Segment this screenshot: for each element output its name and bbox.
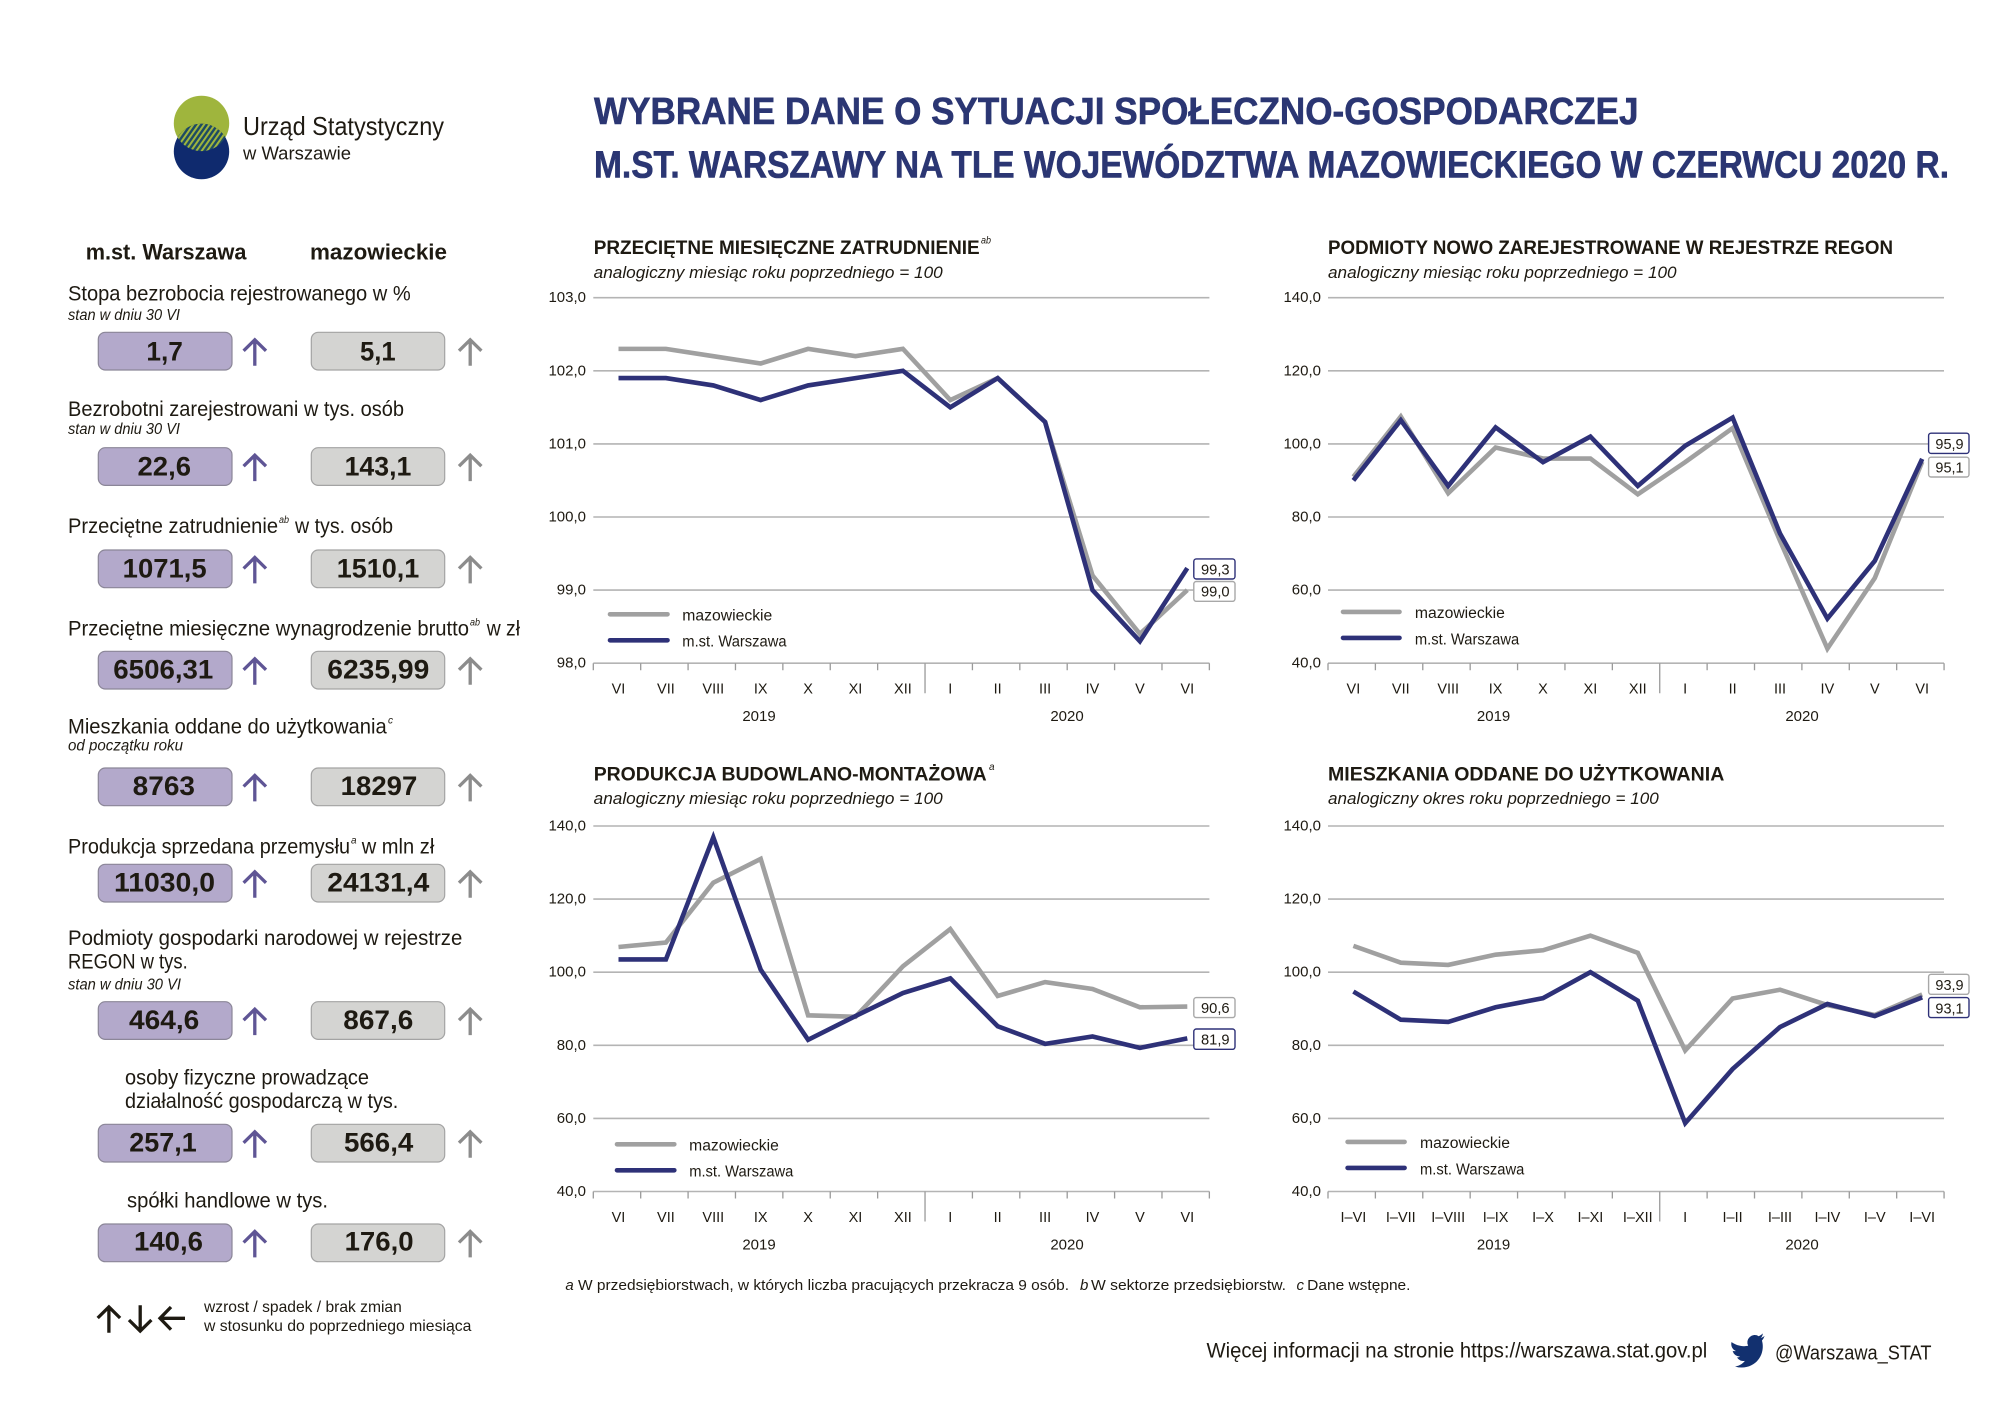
indicator: przeciętne zatrudnienie: Przeciętne zatrudnienie: [68, 515, 278, 538]
legend: m.st. Warszawa: [689, 1164, 794, 1181]
indicator: spółki handlowe: 140,6: [134, 1227, 203, 1257]
indicator: stopa bezrobocia: 1,7: [146, 337, 183, 367]
chart heading: a: [989, 762, 995, 773]
y axis labels: [548, 818, 586, 1200]
x axis labels: XI: [1584, 682, 1597, 698]
footnotes: a: [565, 1277, 574, 1294]
x axis labels: XI: [849, 682, 862, 698]
panel: key indicators: [68, 239, 520, 1335]
indicator: mieszkania oddane: 18297: [341, 771, 417, 801]
chart heading: [594, 762, 995, 808]
x axis labels: 2020: [1050, 1236, 1084, 1253]
x axis labels: III: [1774, 682, 1786, 698]
chart: produkcja budowlano-montażowa: [548, 762, 1235, 1253]
indicator: spółki handlowe: [98, 1189, 481, 1262]
x axis labels: I: [948, 682, 952, 698]
value label: 99,3: [1194, 559, 1235, 579]
y axis labels: 120,0: [548, 891, 586, 908]
chart: mieszkania oddane do użytkowania: [1283, 762, 1969, 1253]
column heading: m.st. Warszawa: m.st. Warszawa: [86, 239, 247, 264]
legend: [610, 607, 787, 651]
x axis labels: [612, 682, 1194, 725]
value label: 81,9: [1194, 1029, 1235, 1049]
y axis labels: 100,0: [548, 964, 586, 981]
line: mazowieckie: [1353, 936, 1922, 1050]
x axis labels: II: [1729, 682, 1737, 698]
y axis labels: 80,0: [1292, 508, 1321, 526]
y axis labels: 60,0: [1292, 1110, 1321, 1127]
y axis labels: 120,0: [1283, 891, 1321, 908]
indicator: stopa bezrobocia: 5,1: [360, 337, 396, 367]
x axis labels: IX: [754, 1210, 768, 1226]
x axis labels: VI: [612, 1210, 625, 1226]
x axis labels: [612, 1210, 1194, 1253]
indicator: osoby fizyczne: 257,1: [129, 1128, 197, 1158]
x axis labels: 2019: [1477, 708, 1510, 725]
indicator: przeciętne zatrudnienie: ab: [279, 515, 289, 526]
legend: m.st. Warszawa: [682, 634, 787, 651]
y axis labels: 40,0: [1292, 1183, 1321, 1200]
footnotes: W sektorze przedsiębiorstw.: [1091, 1277, 1286, 1294]
indicator: wynagrodzenie brutto: 6506,31: [113, 654, 213, 684]
x axis labels: [1341, 1210, 1935, 1253]
indicator: stopa bezrobocia: stan w dniu 30 VI: [68, 307, 181, 324]
indicator: wynagrodzenie brutto: ab: [470, 618, 480, 629]
y axis labels: 100,0: [1283, 435, 1321, 452]
value label: 99,0: 99,0: [1201, 584, 1230, 601]
chart heading: [594, 236, 991, 282]
x axis labels: II: [994, 682, 1002, 698]
x axis labels: I–X: [1532, 1210, 1554, 1226]
value label: 95,1: 95,1: [1935, 460, 1964, 477]
value label: 95,9: [1929, 433, 1969, 453]
line: m.st. Warszawa: [1353, 418, 1922, 619]
indicator: mieszkania oddane: 8763: [133, 771, 195, 801]
value label: 93,1: 93,1: [1935, 1000, 1964, 1018]
x axis labels: XII: [894, 682, 912, 698]
x axis labels: VI: [1347, 682, 1360, 698]
x axis labels: III: [1039, 1210, 1051, 1226]
legend: [1348, 1135, 1525, 1178]
indicator: podmioty gospodarki narodowej: Podmioty gospodarki narodowej w rejestrze: [68, 927, 462, 950]
indicator: spółki handlowe: 176,0: [345, 1227, 414, 1257]
legend: [1343, 605, 1520, 648]
y axis labels: 140,0: [1283, 289, 1321, 306]
indicator: stopa bezrobocia: [68, 283, 481, 370]
x axis labels: I: [1683, 682, 1687, 698]
x axis labels: V: [1135, 1210, 1145, 1226]
y axis labels: [1283, 289, 1321, 672]
indicator: osoby fizyczne: działalność gospodarczą w tys.: [125, 1090, 398, 1113]
value label: 90,6: 90,6: [1201, 1000, 1230, 1017]
x axis labels: XII: [894, 1210, 912, 1226]
indicator: produkcja sprzedana: 24131,4: [327, 868, 429, 898]
x axis labels: 2020: [1785, 708, 1819, 725]
y axis labels: 99,0: [557, 582, 586, 599]
x axis labels: VII: [657, 1210, 675, 1226]
indicator: podmioty gospodarki narodowej: 464,6: [129, 1005, 199, 1035]
x axis labels: III: [1039, 682, 1051, 698]
legend: mazowieckie: [1420, 1135, 1510, 1152]
indicator: wynagrodzenie brutto: w zł: [486, 618, 520, 641]
indicator: bezrobotni zarejestrowani: 143,1: [345, 452, 411, 482]
x axis labels: IV: [1086, 682, 1100, 698]
indicator: osoby fizyczne: 566,4: [344, 1128, 413, 1158]
indicator: podmioty gospodarki narodowej: [68, 927, 481, 1039]
x axis labels: 2020: [1050, 708, 1084, 725]
value label: 99,3: 99,3: [1201, 562, 1230, 579]
icon: twitter bird: [1729, 1333, 1771, 1370]
line: m.st. Warszawa: [1353, 972, 1922, 1123]
x axis labels: I–III: [1768, 1210, 1792, 1226]
chart heading: ab: [981, 236, 991, 247]
x axis labels: X: [803, 1210, 813, 1226]
x axis labels: I–IX: [1483, 1210, 1509, 1226]
indicator: przeciętne zatrudnienie: 1510,1: [337, 553, 419, 583]
footnotes: Dane wstępne.: [1307, 1277, 1410, 1294]
value label: 90,6: [1194, 998, 1235, 1018]
indicator: podmioty gospodarki narodowej: 867,6: [343, 1005, 413, 1035]
indicator: produkcja sprzedana: a: [351, 835, 357, 846]
value label: 99,0: [1194, 582, 1235, 601]
line: m.st. Warszawa: [618, 837, 1187, 1048]
indicator: przeciętne zatrudnienie: [68, 515, 481, 588]
legend: arrows meaning: wzrost / spadek / brak zmian: [203, 1299, 402, 1316]
chart heading: analogiczny okres roku poprzedniego = 100: [1328, 789, 1659, 808]
y axis labels: 80,0: [557, 1037, 586, 1054]
indicator: bezrobotni zarejestrowani: stan w dniu 30 VI: [68, 421, 181, 438]
line: m.st. Warszawa: [618, 371, 1187, 641]
y axis labels: 120,0: [1283, 362, 1321, 379]
x axis labels: IV: [1086, 1210, 1100, 1226]
x axis labels: X: [1538, 682, 1548, 698]
x axis labels: I–XII: [1623, 1210, 1653, 1226]
logo: Urząd Statystyczny w Warszawie: Urząd Statystyczny: [243, 111, 444, 141]
y axis labels: 80,0: [1292, 1037, 1321, 1054]
indicator: wynagrodzenie brutto: [68, 618, 520, 689]
x axis labels: V: [1135, 682, 1145, 698]
indicator: mieszkania oddane: od początku roku: [68, 738, 183, 755]
chart heading: [1328, 762, 1724, 808]
legend: mazowieckie: [1415, 605, 1505, 622]
logo: Urząd Statystyczny w Warszawie: w Warszawie: [242, 142, 351, 163]
footnotes: b: [1080, 1277, 1088, 1294]
indicator: przeciętne zatrudnienie: 1071,5: [123, 553, 207, 583]
x axis labels: [1347, 682, 1929, 725]
y axis labels: [1283, 818, 1321, 1200]
legend: mazowieckie: [689, 1137, 779, 1154]
y axis labels: 60,0: [1292, 582, 1321, 599]
legend: m.st. Warszawa: [1420, 1161, 1525, 1178]
chart heading: [1328, 237, 1893, 282]
legend: m.st. Warszawa: [1415, 631, 1520, 648]
chart heading: analogiczny miesiąc roku poprzedniego = 100: [594, 263, 943, 282]
y axis labels: 98,0: [557, 655, 586, 672]
indicator: stopa bezrobocia: Stopa bezrobocia rejestrowanego w %: [68, 283, 411, 306]
indicator: wynagrodzenie brutto: Przeciętne miesięczne wynagrodzenie brutto: [68, 618, 469, 641]
y axis labels: 140,0: [1283, 818, 1321, 834]
title: WYBRANE DANE O SYTUACJI SPOŁECZNO-GOSPODARCZEJ: [594, 91, 1638, 133]
line: mazowieckie: [618, 349, 1187, 634]
indicator: produkcja sprzedana: [68, 835, 481, 902]
x axis labels: 2019: [1477, 1236, 1510, 1253]
indicator: mieszkania oddane: Mieszkania oddane do użytkowania: [68, 715, 387, 738]
x axis labels: VI: [1915, 682, 1929, 698]
chart heading: PRODUKCJA BUDOWLANO-MONTAŻOWA: [594, 762, 987, 785]
value label: 95,1: [1929, 457, 1969, 477]
chart heading: PRZECIĘTNE MIESIĘCZNE ZATRUDNIENIE: [594, 237, 980, 259]
x axis labels: I–II: [1723, 1210, 1743, 1226]
value label: 81,9: 81,9: [1201, 1032, 1230, 1049]
y axis labels: 102,0: [548, 362, 586, 379]
legend: mazowieckie: [682, 607, 772, 624]
x axis labels: I–IV: [1815, 1210, 1841, 1226]
x axis labels: I–VIII: [1431, 1210, 1465, 1226]
y axis labels: 40,0: [1292, 655, 1321, 672]
y axis labels: 103,0: [548, 289, 586, 306]
x axis labels: 2019: [742, 1236, 776, 1253]
indicator: produkcja sprzedana: Produkcja sprzedana przemysłu: [68, 835, 350, 858]
chart: podmioty nowo zarejestrowane: [1283, 237, 1969, 725]
value label: 93,9: 93,9: [1935, 977, 1964, 994]
indicator: bezrobotni zarejestrowani: [68, 398, 481, 485]
indicator: podmioty gospodarki narodowej: stan w dniu 30 VI: [68, 976, 182, 993]
y axis labels: 40,0: [557, 1183, 586, 1200]
y axis labels: 100,0: [1283, 964, 1321, 981]
value label: 95,9: 95,9: [1935, 436, 1964, 453]
x axis labels: VII: [1392, 682, 1410, 698]
legend: arrows meaning: [98, 1299, 471, 1335]
x axis labels: IX: [1489, 682, 1503, 698]
indicator: osoby fizyczne: [98, 1066, 481, 1162]
footnotes: [565, 1277, 1410, 1294]
x axis labels: VIII: [702, 1210, 724, 1226]
y axis labels: 140,0: [548, 818, 586, 834]
x axis labels: VIII: [1437, 682, 1459, 698]
x axis labels: IV: [1821, 682, 1835, 698]
x axis labels: X: [803, 682, 813, 698]
x axis labels: IX: [754, 682, 768, 698]
chart heading: MIESZKANIA ODDANE DO UŻYTKOWANIA: [1328, 762, 1724, 785]
chart heading: analogiczny miesiąc roku poprzedniego = 100: [1328, 263, 1677, 282]
x axis labels: I–V: [1864, 1210, 1886, 1226]
y axis labels: 60,0: [557, 1110, 586, 1127]
indicator: produkcja sprzedana: 11030,0: [114, 868, 215, 898]
logo: Urząd Statystyczny w Warszawie: [174, 96, 444, 179]
indicator: osoby fizyczne: osoby fizyczne prowadzące: [125, 1066, 369, 1090]
indicator: podmioty gospodarki narodowej: REGON w tys.: [68, 951, 188, 974]
x axis labels: VI: [1180, 682, 1194, 698]
x axis labels: XII: [1629, 682, 1647, 698]
x axis labels: I–XI: [1578, 1210, 1603, 1226]
y axis labels: [548, 289, 586, 672]
x axis labels: I: [948, 1210, 952, 1226]
x axis labels: 2019: [742, 708, 776, 725]
x axis labels: I: [1683, 1210, 1687, 1226]
x axis labels: I–VI: [1909, 1210, 1935, 1226]
value label: 93,9: [1929, 974, 1969, 994]
value label: 93,1: [1929, 998, 1969, 1018]
indicator: mieszkania oddane: [68, 715, 481, 806]
x axis labels: V: [1870, 682, 1880, 698]
chart heading: analogiczny miesiąc roku poprzedniego = 100: [594, 789, 943, 808]
x axis labels: 2020: [1785, 1236, 1819, 1253]
footer: website link: Więcej informacji na stronie https://warszawa.stat.gov.pl: [1206, 1339, 1707, 1362]
indicator: spółki handlowe: spółki handlowe w tys.: [127, 1189, 328, 1212]
title: [594, 91, 1949, 186]
legend: arrows meaning: w stosunku do poprzedniego miesiąca: [203, 1318, 471, 1335]
y axis labels: 101,0: [548, 435, 586, 452]
line: mazowieckie: [1353, 416, 1922, 649]
indicator: produkcja sprzedana: w mln zł: [361, 835, 435, 858]
indicator: mieszkania oddane: c: [388, 715, 393, 726]
chart: przeciętne miesięczne zatrudnienie: [548, 236, 1235, 725]
legend: [617, 1137, 794, 1181]
indicator: przeciętne zatrudnienie: w tys. osób: [294, 515, 393, 538]
x axis labels: XI: [849, 1210, 862, 1226]
x axis labels: I–VI: [1341, 1210, 1366, 1226]
indicator: wynagrodzenie brutto: 6235,99: [327, 654, 429, 684]
indicator: bezrobotni zarejestrowani: Bezrobotni zarejestrowani w tys. osób: [68, 398, 404, 421]
x axis labels: VI: [612, 682, 625, 698]
footnotes: W przedsiębiorstwach, w których liczba pracujących przekracza 9 osób.: [578, 1277, 1069, 1294]
x axis labels: I–VII: [1386, 1210, 1416, 1226]
x axis labels: VIII: [702, 682, 724, 698]
x axis labels: VII: [657, 682, 675, 698]
x axis labels: II: [994, 1210, 1002, 1226]
column heading: mazowieckie: mazowieckie: [310, 239, 447, 264]
footer: twitter handle: @Warszawa_STAT: [1775, 1342, 1932, 1364]
y axis labels: 100,0: [548, 508, 586, 526]
line: mazowieckie: [618, 859, 1187, 1017]
indicator: bezrobotni zarejestrowani: 22,6: [138, 452, 191, 482]
chart heading: PODMIOTY NOWO ZAREJESTROWANE W REJESTRZE REGON: [1328, 237, 1893, 259]
x axis labels: VI: [1180, 1210, 1194, 1226]
footnotes: c: [1296, 1277, 1304, 1294]
